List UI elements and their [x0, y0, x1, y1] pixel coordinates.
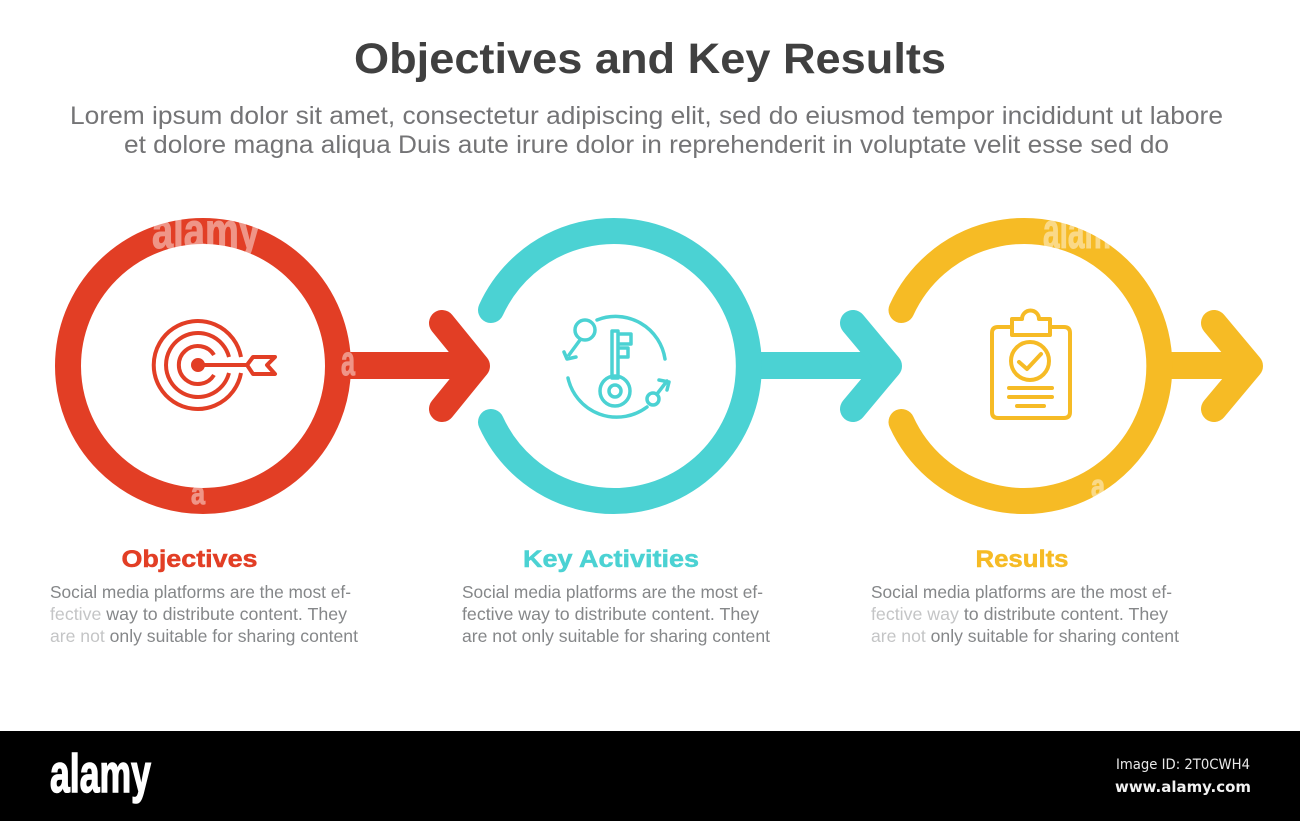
- description: key activities: [462, 582, 770, 646]
- watermark overlays: alam: [1043, 203, 1111, 259]
- footer bar: [0, 731, 1300, 821]
- description: results: are not only suitable for sharing content: [871, 626, 1179, 646]
- description: objectives: fective way to distribute content. They: [50, 604, 347, 624]
- description: key activities: Social media platforms are the most ef-: [462, 582, 763, 602]
- description: results: fective way to distribute content. They: [871, 604, 1168, 624]
- description: results: [871, 582, 1179, 646]
- description: objectives: [50, 582, 358, 646]
- ring: objectives: [68, 231, 338, 501]
- ring: results: [902, 231, 1159, 501]
- arrow: key activities to results: [755, 323, 889, 409]
- description: results: Social media platforms are the most ef-: [871, 582, 1172, 602]
- watermark overlays: alamy: [152, 203, 260, 259]
- footer image id: Image ID: 2T0CWH4: [1116, 757, 1250, 773]
- description: objectives: are not only suitable for sharing content: [50, 626, 358, 646]
- watermark overlays: [152, 203, 1111, 511]
- footer website: www.alamy.com: [1115, 778, 1251, 796]
- icon: key with cycle arrows: [564, 316, 669, 417]
- intro paragraph: [70, 102, 1223, 159]
- watermark overlays: a: [1091, 468, 1105, 504]
- column: key activities: [462, 546, 770, 646]
- description: objectives: Social media platforms are the most ef-: [50, 582, 351, 602]
- description: key activities: are not only suitable for sharing content: [462, 626, 770, 646]
- column: objectives: [50, 546, 358, 646]
- title: Objectives and Key Results: [354, 35, 946, 83]
- heading: key activities: Key Activities: [523, 546, 699, 573]
- footer logo: alamy: [50, 744, 151, 804]
- heading: objectives: Objectives: [122, 546, 258, 573]
- icon: clipboard with check: [992, 310, 1070, 418]
- ring: key activities: [491, 231, 749, 501]
- arrow: objectives to key activities: [345, 323, 478, 409]
- watermark overlays: a: [341, 337, 355, 384]
- intro paragraph: Lorem ipsum dolor sit amet, consectetur adipiscing elit, sed do eiusmod tempor incididunt ut labore: [70, 102, 1223, 130]
- description: key activities: fective way to distribute content. They: [462, 604, 759, 624]
- icon: target with arrow: [154, 321, 275, 409]
- column: results: [871, 546, 1179, 646]
- arrow: results output: [1165, 323, 1250, 409]
- intro paragraph: et dolore magna aliqua Duis aute irure dolor in reprehenderit in voluptate velit esse sed do: [124, 131, 1169, 159]
- heading: results: Results: [976, 546, 1068, 573]
- watermark overlays: a: [191, 475, 205, 511]
